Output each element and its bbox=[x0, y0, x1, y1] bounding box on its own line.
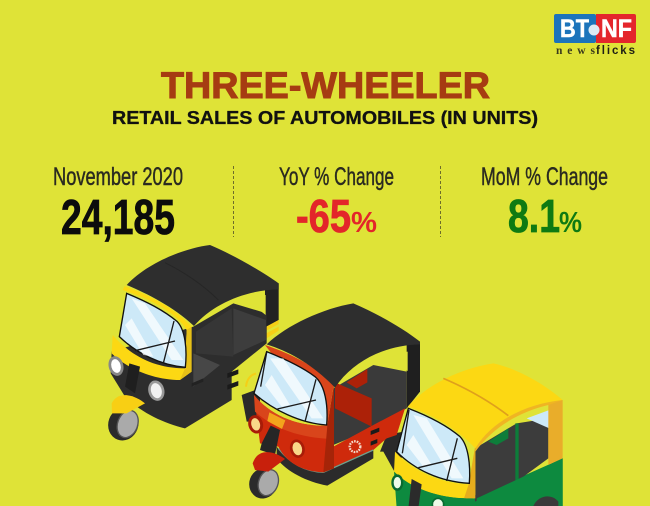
green front bbox=[394, 472, 473, 506]
stat: MoM change: % bbox=[559, 207, 582, 239]
yellow rear opening bbox=[247, 295, 266, 315]
divider bbox=[440, 166, 442, 237]
stat: MoM change: 8.1 bbox=[508, 190, 560, 242]
stat: MoM change bbox=[481, 163, 608, 242]
mudguard bbox=[112, 395, 145, 413]
windshield bbox=[397, 408, 470, 483]
body silhouette bbox=[111, 303, 267, 428]
red body lower bbox=[323, 408, 405, 473]
yellow front band bbox=[394, 448, 475, 498]
logo: BT NF newsflicks: NF bbox=[601, 15, 632, 43]
headlights bbox=[106, 354, 126, 378]
windshield bbox=[254, 352, 327, 425]
stat: November 2020 units: November 2020 bbox=[53, 163, 183, 191]
roof bbox=[408, 363, 563, 448]
rear panel bbox=[548, 400, 563, 465]
back pillar bbox=[407, 340, 420, 408]
logo: BT NF newsflicks: BT bbox=[560, 15, 589, 43]
roof bbox=[127, 245, 279, 326]
title: THREE-WHEELER bbox=[161, 65, 490, 106]
stat: YoY change: YoY % Change bbox=[279, 163, 394, 191]
cabin interior bbox=[475, 418, 548, 502]
logo: BT NF newsflicks: news bbox=[556, 45, 596, 57]
illustration: red auto-rickshaw bbox=[242, 303, 420, 503]
illustration: yellow and green auto-rickshaw bbox=[391, 363, 563, 506]
front wheel bbox=[104, 403, 143, 445]
front wheel bbox=[245, 464, 282, 503]
black skirt bbox=[277, 447, 373, 486]
back pillar bbox=[265, 282, 279, 327]
illustration: black and yellow auto-rickshaw bbox=[104, 245, 279, 445]
subtitle: RETAIL SALES OF AUTOMOBILES (IN UNITS) bbox=[112, 107, 538, 128]
orange plate and headlights bbox=[267, 412, 285, 429]
logo: BT NF newsflicks bbox=[554, 14, 636, 57]
cabin seats bbox=[196, 308, 233, 357]
green lower body bbox=[400, 458, 563, 506]
divider bbox=[232, 166, 234, 237]
stat: YoY change: -65 bbox=[296, 190, 351, 242]
front yellow band and frame bbox=[112, 286, 192, 380]
stat: YoY change bbox=[279, 163, 394, 242]
flower emblem bbox=[350, 441, 360, 452]
cabin interior bbox=[333, 365, 407, 445]
stat: November 2020 units bbox=[53, 163, 183, 245]
roof bbox=[267, 303, 420, 388]
stat: November 2020 units: 24,185 bbox=[61, 191, 175, 245]
headlights and centre post bbox=[391, 474, 403, 491]
red front bbox=[254, 388, 333, 472]
windshield bbox=[119, 293, 186, 367]
rear wheel and yellow handle bbox=[242, 388, 260, 422]
mudguard bbox=[253, 452, 285, 472]
stat: YoY change: % bbox=[351, 207, 377, 239]
logo: BT NF newsflicks: flicks bbox=[596, 45, 635, 57]
